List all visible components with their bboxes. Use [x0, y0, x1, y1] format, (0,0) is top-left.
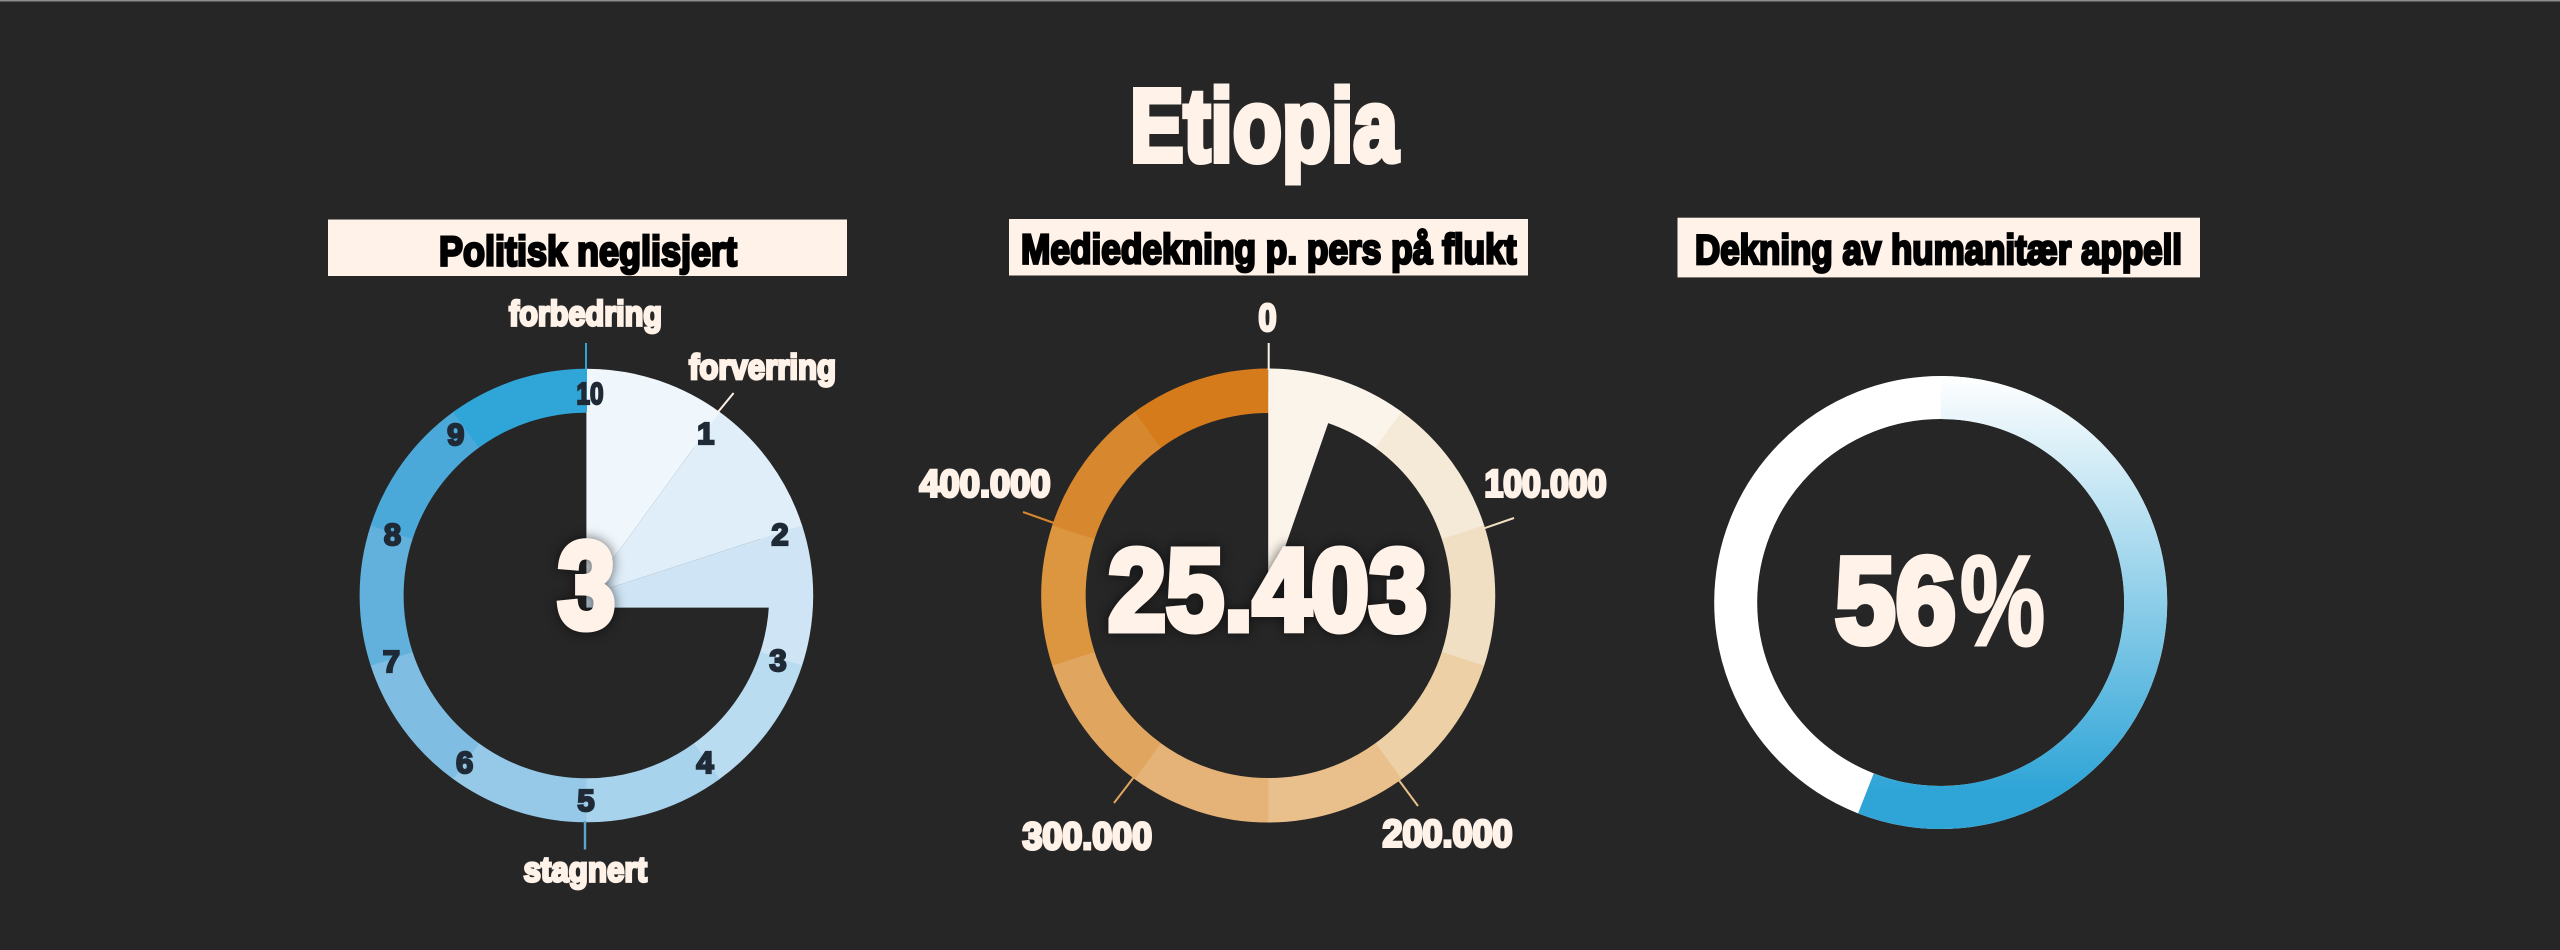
dial numbers: 9	[447, 417, 464, 452]
panel: dekning av humanitaer appell	[1678, 218, 2200, 807]
value: 56%: %	[1960, 530, 2045, 673]
tick: 0	[1268, 343, 1270, 370]
heading: dekning	[1678, 218, 2200, 277]
value: 56%: 56	[1835, 532, 1956, 668]
dial numbers: 3	[769, 643, 787, 678]
heading: politisk neglisjert	[328, 220, 847, 276]
label: 400.000: 400.000	[920, 464, 1050, 506]
dial numbers	[383, 376, 789, 818]
dial numbers: 6	[456, 745, 473, 780]
value: 56%	[1835, 530, 2045, 673]
label: forverring: forverring	[689, 348, 836, 387]
heading: politisk neglisjert: Politisk neglisjert	[439, 228, 737, 275]
label: stagnert: stagnert	[524, 851, 647, 890]
dial: political neglect ring	[300, 309, 872, 882]
value: 3: 3	[558, 517, 615, 653]
label: 100.000: 100.000	[1484, 464, 1606, 506]
dial numbers: 10	[576, 376, 604, 411]
tick: forverring	[718, 393, 734, 412]
label: 0: 0	[1258, 298, 1276, 340]
dial numbers: 8	[384, 517, 401, 552]
label: 300.000: 300.000	[1022, 816, 1152, 858]
tick: 400.000	[1023, 512, 1054, 523]
label: 200.000: 200.000	[1382, 814, 1512, 856]
label: forbedring: forbedring	[509, 295, 662, 334]
tick: 300.000	[1114, 777, 1134, 803]
dial numbers: 5	[577, 783, 595, 818]
dial: media coverage ring	[982, 309, 1554, 882]
dial numbers: 1	[697, 416, 714, 451]
tick: stagnert	[584, 821, 586, 850]
heading: dekning: Dekning av humanitær appell	[1695, 226, 2182, 273]
donut: 56 percent coverage	[1736, 398, 2146, 808]
tick: forbedring	[585, 343, 587, 412]
panel: politisk neglisjert	[300, 220, 872, 890]
value: 25.403: 25.403	[1108, 525, 1427, 655]
tick: 100.000	[1483, 518, 1514, 529]
title: Etiopia	[1130, 68, 1399, 183]
dial numbers: 2	[771, 517, 789, 552]
heading: mediedekning: Mediedekning p. pers på flukt	[1021, 226, 1517, 273]
panel: mediedekning	[920, 219, 1606, 882]
dial numbers: 7	[383, 644, 400, 679]
tick: 200.000	[1398, 779, 1418, 806]
dial numbers: 4	[696, 745, 714, 780]
